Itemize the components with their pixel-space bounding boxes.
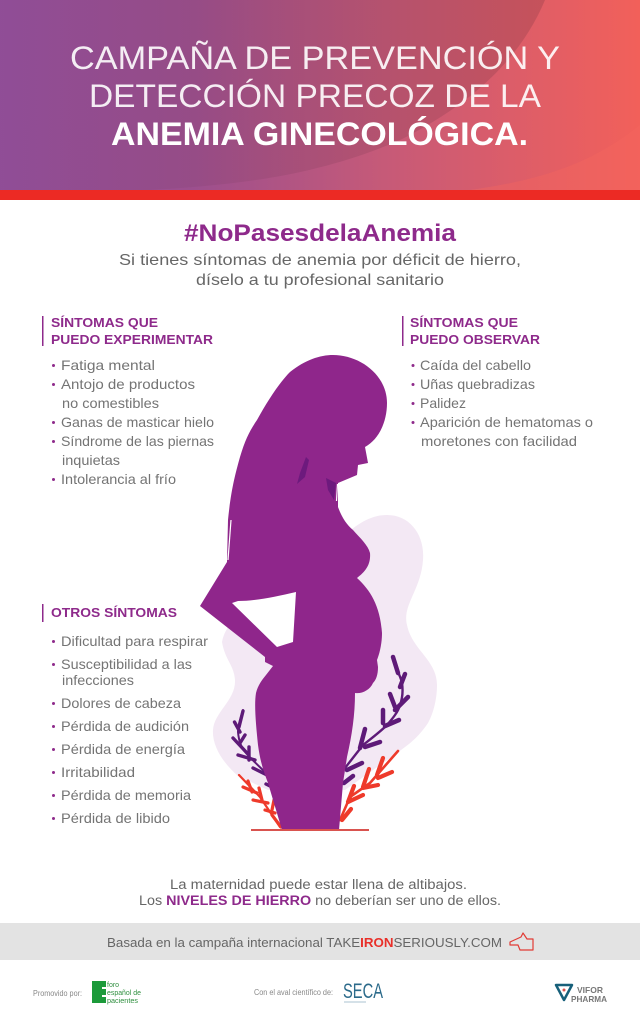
list: observe: Uñas quebradizas (420, 376, 535, 392)
background blob (213, 515, 437, 790)
list: experience: Ganas de masticar hielo (61, 414, 214, 430)
plant: red right branch (340, 751, 398, 820)
plant: dark right branch (344, 657, 408, 783)
subtitle: Si tienes síntomas de anemia por déficit de hierro, (119, 252, 521, 269)
title (70, 40, 560, 152)
header banner (0, 0, 640, 200)
list: experience: inquietas (62, 452, 120, 468)
title: DETECCIÓN PRECOZ DE LA (89, 78, 542, 114)
panel: symptoms I can experience (42, 315, 214, 487)
silhouette: pregnant woman (200, 355, 387, 830)
list: observe: Palidez (420, 395, 466, 411)
list: other symptoms: Pérdida de libido (61, 810, 170, 826)
plant: red left branch (239, 775, 281, 827)
list: observe (412, 357, 593, 449)
heading: observe: SÍNTOMAS QUE (410, 315, 518, 330)
heading: experience (51, 315, 214, 347)
list: experience: Intolerancia al frío (61, 471, 176, 487)
footer: scientific endorsement: Con el aval científico de: (254, 988, 333, 997)
logo: Vifor Pharma: VIFOR (577, 985, 603, 995)
logo: foro español de pacientes (92, 981, 141, 1005)
logo: Vifor Pharma: PHARMA (571, 994, 607, 1004)
list: observe: Aparición de hematomas o (420, 414, 593, 430)
list: other symptoms: Pérdida de energía (61, 741, 185, 757)
icon: pointing hand (510, 933, 533, 950)
list: experience: Antojo de productos (61, 376, 195, 392)
list: other symptoms: Pérdida de audición (61, 718, 189, 734)
list: other symptoms: infecciones (62, 672, 134, 688)
logo: SECA: SECA (343, 980, 383, 1003)
subtitle (119, 252, 521, 289)
heading: experience: PUEDO EXPERIMENTAR (51, 332, 214, 347)
list: experience: no comestibles (62, 395, 159, 411)
list: other symptoms: Dificultad para respirar (61, 633, 208, 649)
subtitle: díselo a tu profesional sanitario (196, 272, 444, 289)
panel: other symptoms (42, 604, 208, 826)
footer: scientific endorsement (254, 980, 383, 1003)
closing message (139, 877, 501, 908)
list: other symptoms: Susceptibilidad a las (61, 656, 192, 672)
heading: other symptoms: OTROS SÍNTOMAS (51, 605, 177, 620)
panel: symptoms I can observe (402, 315, 593, 449)
closing message: Los NIVELES DE HIERRO no deberían ser uno de ellos. (139, 893, 501, 908)
campaign band (0, 923, 640, 960)
logo: foro español de pacientes: español de (107, 990, 141, 997)
list: observe: moretones con facilidad (421, 433, 577, 449)
title: ANEMIA GINECOLÓGICA. (111, 116, 528, 152)
footer: promoter: Promovido por: (33, 989, 82, 998)
logo: Vifor Pharma (556, 985, 607, 1004)
campaign text: Basada en la campaña internacional TAKE IRONSERIOUSLY.COM (107, 935, 502, 950)
list: other symptoms: Irritabilidad (61, 764, 135, 780)
hashtag heading: #NoPasesdelaAnemia (184, 220, 457, 247)
list: experience (52, 357, 214, 487)
list: other symptoms (52, 633, 208, 826)
footer: promoter (33, 981, 141, 1005)
logo: foro español de pacientes: pacientes (107, 998, 139, 1005)
list: observe: Caída del cabello (420, 357, 531, 373)
ground line (251, 829, 369, 831)
list: other symptoms: Pérdida de memoria (61, 787, 191, 803)
plant: dark left branch (233, 710, 272, 787)
title: CAMPAÑA DE PREVENCIÓN Y (70, 40, 560, 76)
closing message: La maternidad puede estar llena de altibajos. (170, 877, 467, 892)
heading: observe (410, 315, 541, 347)
heading: experience: SÍNTOMAS QUE (51, 315, 158, 330)
heading: observe: PUEDO OBSERVAR (410, 332, 541, 347)
list: experience: Fatiga mental (61, 357, 155, 373)
list: other symptoms: Dolores de cabeza (61, 695, 181, 711)
list: experience: Síndrome de las piernas (61, 433, 214, 449)
logo: foro español de pacientes: foro (107, 982, 119, 989)
